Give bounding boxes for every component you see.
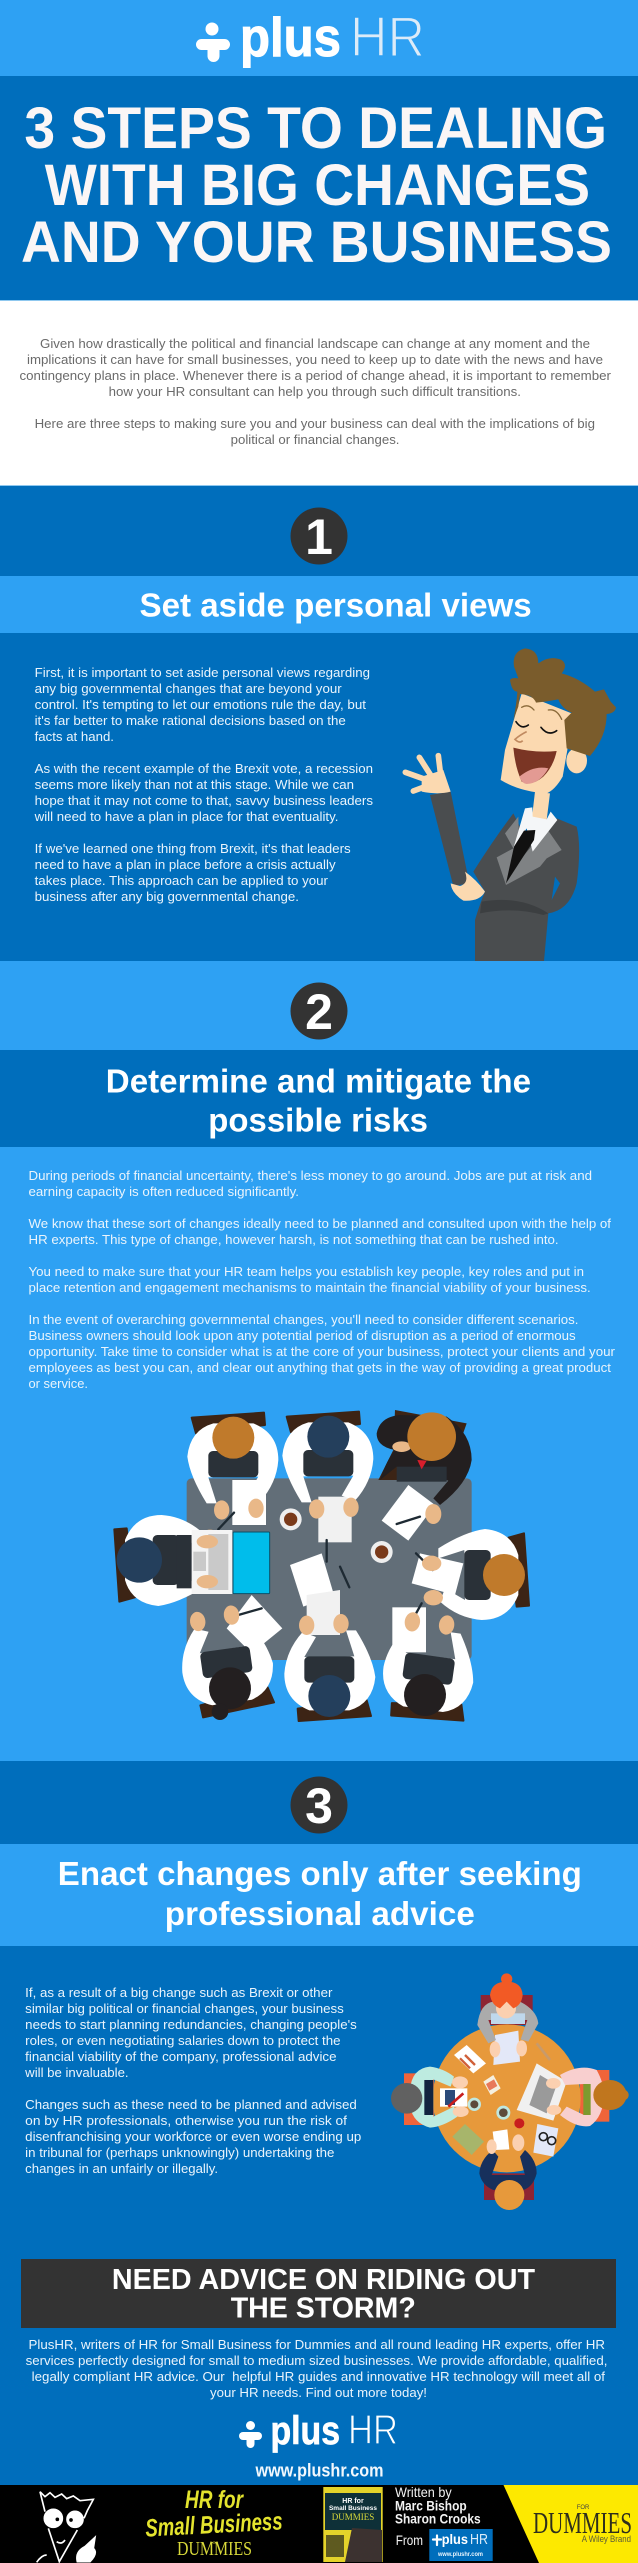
step number 1 (290, 508, 348, 565)
logo: plusHR top: plus (240, 6, 341, 68)
step 2 text: opportunity. Take time to consider what is at the core of your business, protect your clients and your (28, 1344, 616, 1359)
footer banner: HR for Small Business for Dummies (0, 2484, 638, 2563)
call to action text: PlusHR, writers of HR for Small Business for Dummies and all round leading HR experts, offer HR (28, 2337, 605, 2352)
call to action text: legally compliant HR advice. Our helpful HR guides and innovative HR technology will meet all of (32, 2369, 605, 2384)
illustration: laughing businessman (405, 648, 616, 961)
call to action text: services perfectly designed for small to medium sized businesses. We provide affordable, qualified, (26, 2353, 607, 2368)
step 1 text: business after any big governmental change. (35, 889, 299, 904)
person: left, grey hair (391, 2067, 469, 2128)
step 3 text: similar big political or financial changes, your business (25, 2001, 344, 2016)
step number 1: 1 (305, 509, 333, 565)
intro text: Here are three steps to making sure you and your business can deal with the implications of big (35, 416, 595, 431)
step number 3 (290, 1776, 348, 1834)
step 3 text: on by HR professionals, otherwise you run the risk of (25, 2113, 347, 2128)
step 2 text: employees as best you can, and clear out anything that gets in the way of providing a great product (28, 1360, 611, 1375)
step 2 text (28, 1168, 616, 1391)
step 2 text: Business owners should look upon any potential period of disruption as a period of enormous (28, 1328, 576, 1343)
step 3 text: Changes such as these need to be planned and advised (25, 2097, 357, 2112)
authors: Written by (395, 2484, 452, 2500)
person: bottom, navy jacket (479, 2134, 537, 2210)
banner title (145, 2486, 283, 2543)
step 2 text: earning capacity is often reduced significantly. (28, 1184, 299, 1199)
step number 2 (290, 982, 348, 1040)
person: top centre (282, 1412, 373, 1519)
step 3 text: disenfranchising your workforce or even worse ending up (25, 2129, 361, 2144)
book cover: DUMMIES (332, 2512, 374, 2522)
banner Dummies wordmark: FOR (210, 2540, 219, 2545)
heading: step 3 (58, 1855, 582, 1932)
step 1 text: will need to have a plan in place for that eventuality. (34, 809, 338, 824)
step number 2: 2 (305, 984, 333, 1040)
step 2 text: You need to make sure that your HR team helps you establish key people, key roles and put in (28, 1264, 584, 1279)
call to action text (26, 2337, 607, 2400)
intro text: how your HR consultant can help you through such difficult transitions. (109, 384, 521, 399)
title (21, 96, 612, 275)
step 3 text: If, as a result of a big change such as Brexit or other (25, 1985, 333, 2000)
logo: plusHR top: HR (350, 5, 425, 69)
panel: introduction (0, 300, 638, 486)
illustration: round table meeting (391, 1973, 629, 2210)
heading box: NEED ADVICE ON RIDING OUT (112, 2264, 535, 2296)
step 1 text: facts at hand. (35, 729, 114, 744)
logo: plusHR badge (429, 2529, 493, 2561)
heading: step 3: professional advice (165, 1895, 475, 1932)
step 1 text: As with the recent example of the Brexit vote, a recession (35, 761, 373, 776)
logo: plusHR badge: www.plushr.com (437, 2551, 483, 2558)
intro text: implications it can have for small businesses, you need to keep up to date with the news and have (27, 352, 603, 367)
logo: plusHR top (196, 5, 425, 69)
step 2 text: We know that these sort of changes ideally need to be planned and consulted upon with the help of (28, 1216, 611, 1231)
heading box: THE STORM? (231, 2292, 416, 2324)
intro text: political or financial changes. (231, 432, 400, 447)
For Dummies brand mark: FOR (577, 2505, 590, 2511)
person: left with laptop (114, 1515, 270, 1606)
heading: step 2: Determine and mitigate the (106, 1062, 531, 1100)
person: bottom left (174, 1601, 279, 1720)
person: right with laptop (517, 2063, 629, 2126)
step 2 text: place retention and engagement mechanisms to maintain the financial viability of your business. (28, 1280, 591, 1295)
person: bottom centre (284, 1614, 375, 1721)
step 3 text: needs to start planning redundancies, changing people's (25, 2017, 357, 2032)
step 1 text: takes place. This approach can be applied to your (35, 873, 329, 888)
step 3 text: changes in an unfairly or illegally. (25, 2161, 218, 2176)
step 2 text: HR experts. This type of change, however harsh, is not something that can be rushed into. (28, 1232, 559, 1247)
logo: plusHR bottom: HR (348, 2406, 398, 2453)
title: 3 STEPS TO DEALING (24, 96, 607, 161)
panel: step 2 (0, 961, 638, 1761)
book cover: Small Business (329, 2505, 377, 2512)
step 1 text: hope that it may not come to that, savvy business leaders (35, 793, 373, 808)
banner Dummies wordmark: DUMMIES (177, 2538, 252, 2560)
step 3 text (24, 1985, 361, 2176)
panel: step 1 (0, 486, 638, 961)
panel: step 3 (0, 1761, 638, 2485)
heading box (21, 2259, 616, 2328)
heading: step 2 (106, 1062, 531, 1138)
panel: title (0, 76, 638, 300)
call to action text: your HR needs. Find out more today! (210, 2385, 427, 2400)
icon: Dummies cartoon man (37, 2492, 95, 2562)
step 1 text: First, it is important to set aside personal views regarding (35, 665, 370, 680)
title: WITH BIG CHANGES (45, 153, 590, 218)
step 1 text (34, 665, 373, 904)
step 1 text: any big governmental changes that are beyond your (35, 681, 342, 696)
person: top left (187, 1413, 278, 1520)
step 1 text: it's far better to make rational decisions based on the (35, 713, 346, 728)
step 2 text: During periods of financial uncertainty, there's less money to go around. Jobs are put at risk and (28, 1168, 592, 1183)
heading: step 3: Enact changes only after seeking (58, 1855, 582, 1892)
step 3 text: will be invaluable. (24, 2065, 129, 2080)
intro text: Given how drastically the political and financial landscape can change at any moment and the (40, 336, 590, 351)
person: top right in dark suit (377, 1410, 472, 1524)
step 3 text: financial viability of the company, professional advice (25, 2049, 336, 2064)
step 1 text: If we've learned one thing from Brexit, it's that leaders (35, 841, 351, 856)
step 1 text: seems more likely than not at this stage. While we can (35, 777, 354, 792)
logo: plusHR badge: HR (470, 2531, 488, 2548)
logo: plusHR bottom: plus (270, 2409, 340, 2453)
step 2 text: or service. (28, 1376, 88, 1391)
step 2 text: In the event of overarching governmental changes, you'll need to consider different scenarios. (28, 1312, 578, 1327)
step 1 text: need to have a plan in place before a crisis actually (35, 857, 336, 872)
authors: From (396, 2532, 423, 2548)
authors: Sharon Crooks (395, 2510, 481, 2526)
logo: plusHR bottom (239, 2406, 398, 2453)
title: AND YOUR BUSINESS (21, 210, 612, 275)
person: right (422, 1529, 529, 1620)
banner title: HR for (185, 2486, 244, 2514)
heading: step 1: Set aside personal views (140, 586, 532, 624)
authors (395, 2484, 481, 2548)
book cover: HR for (342, 2498, 364, 2505)
banner title: Small Business (145, 2507, 283, 2543)
panel: header (0, 0, 638, 76)
person: bottom right (377, 1608, 482, 1726)
step 3 text: roles, or even negotiating salaries down to protect the (25, 2033, 340, 2048)
logo: plusHR badge: plus (442, 2531, 468, 2547)
authors: Marc Bishop (395, 2498, 467, 2514)
intro text (20, 336, 612, 447)
person: top, red hair (477, 1973, 538, 2065)
book cover (323, 2487, 383, 2562)
website: www.plushr.com (255, 2460, 384, 2480)
step number 3: 3 (305, 1778, 333, 1834)
intro text: contingency plans in place. Whenever there is a period of change ahead, it is important to remember (20, 368, 612, 383)
panel: call to action (21, 2259, 616, 2480)
heading: step 2: possible risks (208, 1102, 428, 1138)
step 3 text: in tribunal for (perhaps unknowingly) undertaking the (25, 2145, 334, 2160)
step 1 text: control. It's tempting to let our emotions rule the day, but (35, 697, 366, 712)
illustration: meeting around table (114, 1410, 529, 1726)
